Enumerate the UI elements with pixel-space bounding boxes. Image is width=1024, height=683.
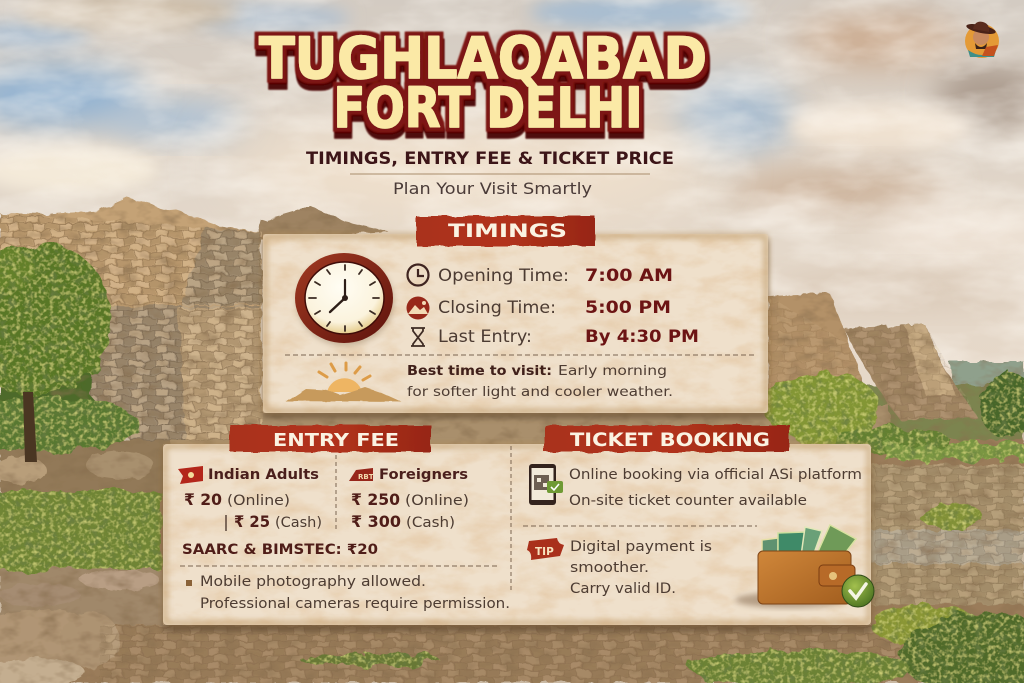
logo: explorer mascot (965, 22, 999, 58)
icon: foreigners ticket (349, 468, 374, 481)
row: opening time: Opening Time: (438, 266, 569, 286)
banner: timings: TIMINGS (448, 220, 567, 242)
text: on-site counter: On-site ticket counter available (569, 493, 807, 509)
icon: foreigners ticket: RBT (358, 473, 374, 481)
fee: foreigners online: (Online) (405, 493, 469, 509)
fee: foreigners cash: ₹ 300 (351, 512, 401, 531)
title (259, 26, 707, 140)
note: photography (186, 574, 510, 612)
icon: phone with qr code (529, 464, 563, 505)
fee: indian online: (Online) (227, 493, 290, 509)
icon: green check badge (842, 575, 874, 607)
row: closing time (406, 296, 671, 320)
icon: indian adults ticket (178, 466, 203, 484)
panel: timings (263, 216, 768, 418)
note: photography: Professional cameras require permission. (200, 596, 510, 612)
background: trees and grass (0, 242, 1024, 683)
icon: tip ticket (527, 538, 564, 560)
tagline: Plan Your Visit Smartly (393, 179, 592, 198)
fee: indian cash: (Cash) (275, 515, 322, 531)
background: tree trunk (23, 392, 37, 462)
row: closing time: 5:00 PM (585, 298, 671, 318)
row: last entry: By 4:30 PM (585, 327, 699, 347)
text: digital payment tip (570, 539, 712, 597)
fee: foreigners cash (351, 512, 455, 531)
icon: tip ticket: TIP (535, 546, 554, 558)
fee: indian cash (226, 512, 322, 531)
row: opening time (408, 264, 673, 286)
row: last entry (411, 327, 699, 347)
text: best time to visit (407, 363, 673, 400)
heading: indian adults: Indian Adults (208, 467, 319, 483)
text: online booking: Online booking via official ASi platform (569, 467, 862, 483)
fee: saarc and bimstec: SAARC & BIMSTEC: ₹20 (182, 542, 378, 558)
icon: wall clock (295, 253, 394, 346)
heading: foreigners: Foreigners (379, 467, 468, 483)
row: opening time: 7:00 AM (585, 266, 673, 286)
subtitle: TIMINGS, ENTRY FEE & TICKET PRICE (306, 149, 674, 168)
banner: timings (416, 216, 595, 246)
title: TUGHLAQABAD (259, 26, 707, 92)
text: digital payment tip: Carry valid ID. (570, 581, 676, 597)
title: FORT DELHI (334, 76, 642, 140)
text: digital payment tip: Digital payment is (570, 539, 712, 555)
fee: foreigners cash: (Cash) (406, 515, 455, 531)
background: sky with clouds (0, 0, 1024, 400)
panel: entry fee and ticket booking (163, 425, 874, 631)
fee: indian online (184, 490, 290, 509)
note: photography: Mobile photography allowed. (200, 574, 426, 590)
row: last entry: Last Entry: (438, 327, 532, 347)
background: fort walls and rocks (0, 198, 1024, 683)
fee: indian online: ₹ 20 (184, 490, 222, 509)
banner: ticket booking: TICKET BOOKING (570, 430, 770, 451)
text: digital payment tip: smoother. (570, 560, 649, 576)
text: best time to visit: Early morning (558, 363, 667, 379)
banner: entry fee (230, 425, 431, 452)
text: best time to visit: Best time to visit: (407, 363, 552, 379)
icon: sunrise over ruins (285, 363, 402, 402)
icon: wallet with cash (735, 525, 874, 608)
banner: entry fee: ENTRY FEE (273, 430, 399, 451)
fee: foreigners online (351, 490, 469, 509)
text: best time to visit: for softer light and cooler weather. (407, 384, 673, 400)
fee: indian cash: ₹ 25 (234, 512, 270, 531)
fee: foreigners online: ₹ 250 (351, 490, 400, 509)
row: closing time: Closing Time: (438, 298, 556, 318)
banner: ticket booking (544, 425, 790, 452)
